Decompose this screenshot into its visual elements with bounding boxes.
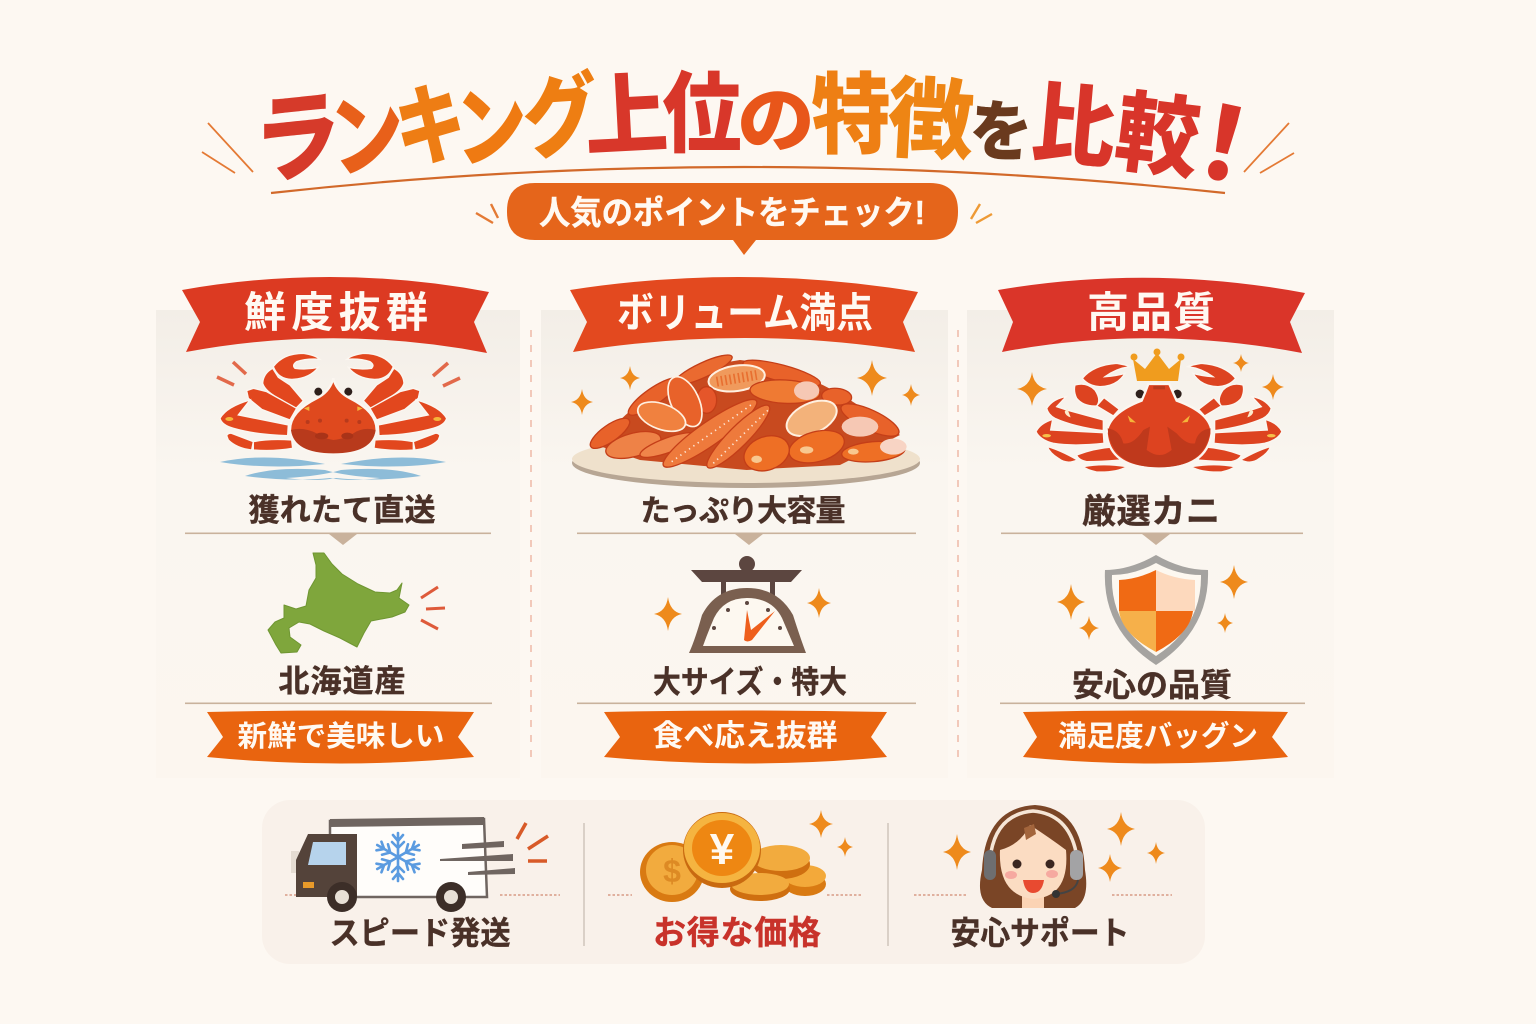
label: たっぷり大容量: たっぷり大容量	[640, 495, 846, 528]
icon: kitchen scale	[654, 556, 831, 653]
title: ランキング上位の特徴を比較！: 比	[1028, 75, 1120, 180]
icon: crab legs on plate	[571, 350, 920, 488]
label: 安心の品質: 安心の品質	[1072, 667, 1232, 703]
subtitle speech bubble: 人気のポイントをチェック!	[539, 194, 925, 231]
label: 大サイズ・特大: 大サイズ・特大	[653, 665, 847, 700]
icon: red crab on water	[217, 353, 460, 480]
ribbon heading: 高品質	[998, 278, 1305, 353]
title: ランキング上位の特徴を比較！: の	[737, 81, 815, 161]
label: 厳選カニ: 厳選カニ	[1082, 493, 1220, 531]
icon: support operator	[943, 805, 1165, 908]
ribbon: 新鮮で美味しい	[207, 710, 474, 764]
label: スピード発送: スピード発送	[330, 915, 510, 951]
title: ランキング上位の特徴を比較！: ！	[1164, 79, 1283, 210]
title: ランキング上位の特徴を比較！: 較	[1110, 83, 1205, 191]
panel: volume	[541, 310, 948, 778]
icon: quality shield	[1057, 555, 1248, 665]
icon: crowned crab	[1017, 348, 1284, 472]
ribbon heading: 鮮度抜群: 鮮度抜群	[244, 289, 428, 336]
title: ランキング上位の特徴を比較！	[253, 65, 1283, 210]
title: ランキング上位の特徴を比較！: キ	[391, 75, 470, 179]
panel: bottom benefits	[262, 800, 1205, 964]
panel: quality	[967, 310, 1334, 778]
ribbon heading: ボリューム満点	[570, 277, 918, 352]
title: ランキング上位の特徴を比較！: 特	[811, 66, 891, 165]
title: ランキング上位の特徴を比較！: を	[967, 93, 1034, 171]
title: ランキング上位の特徴を比較！: ラ	[253, 80, 341, 198]
ribbon: 満足度バッグン: 満足度バッグン	[1058, 720, 1258, 753]
title arc underline	[271, 167, 1225, 193]
title: ランキング上位の特徴を比較！: ン	[452, 77, 531, 180]
icon: yen coins	[640, 810, 853, 902]
ribbon heading: 高品質: 高品質	[1087, 289, 1215, 336]
subtitle speech bubble	[476, 183, 992, 255]
ribbon: 満足度バッグン	[1023, 710, 1288, 764]
title: ランキング上位の特徴を比較！: 位	[662, 65, 742, 164]
label: お得な価格: お得な価格	[653, 914, 821, 951]
panel: freshness	[156, 310, 520, 778]
ribbon: 新鮮で美味しい: 新鮮で美味しい	[238, 720, 444, 753]
ribbon heading: ボリューム満点: ボリューム満点	[617, 290, 873, 336]
dividers with pointers	[185, 532, 1305, 704]
icon: refrigerated truck	[291, 817, 548, 912]
label: 北海道産: 北海道産	[278, 664, 406, 699]
icon: yen coins: $	[663, 853, 681, 889]
icon: Hokkaido map	[268, 553, 445, 653]
ribbon: 食べ応え抜群	[604, 710, 887, 764]
ribbon: 食べ応え抜群: 食べ応え抜群	[652, 720, 838, 753]
label: 安心サポート: 安心サポート	[950, 915, 1130, 951]
title: ランキング上位の特徴を比較！: ン	[323, 80, 411, 191]
icon: yen coins: ¥	[710, 825, 735, 874]
ribbon heading: 鮮度抜群	[182, 277, 489, 353]
title: ランキング上位の特徴を比較！: グ	[519, 65, 601, 171]
title: ランキング上位の特徴を比較！: 上	[582, 66, 670, 169]
label: 獲れたて直送: 獲れたて直送	[248, 493, 436, 528]
title accent lines	[202, 123, 1294, 173]
title: ランキング上位の特徴を比較！: 徴	[885, 70, 976, 172]
